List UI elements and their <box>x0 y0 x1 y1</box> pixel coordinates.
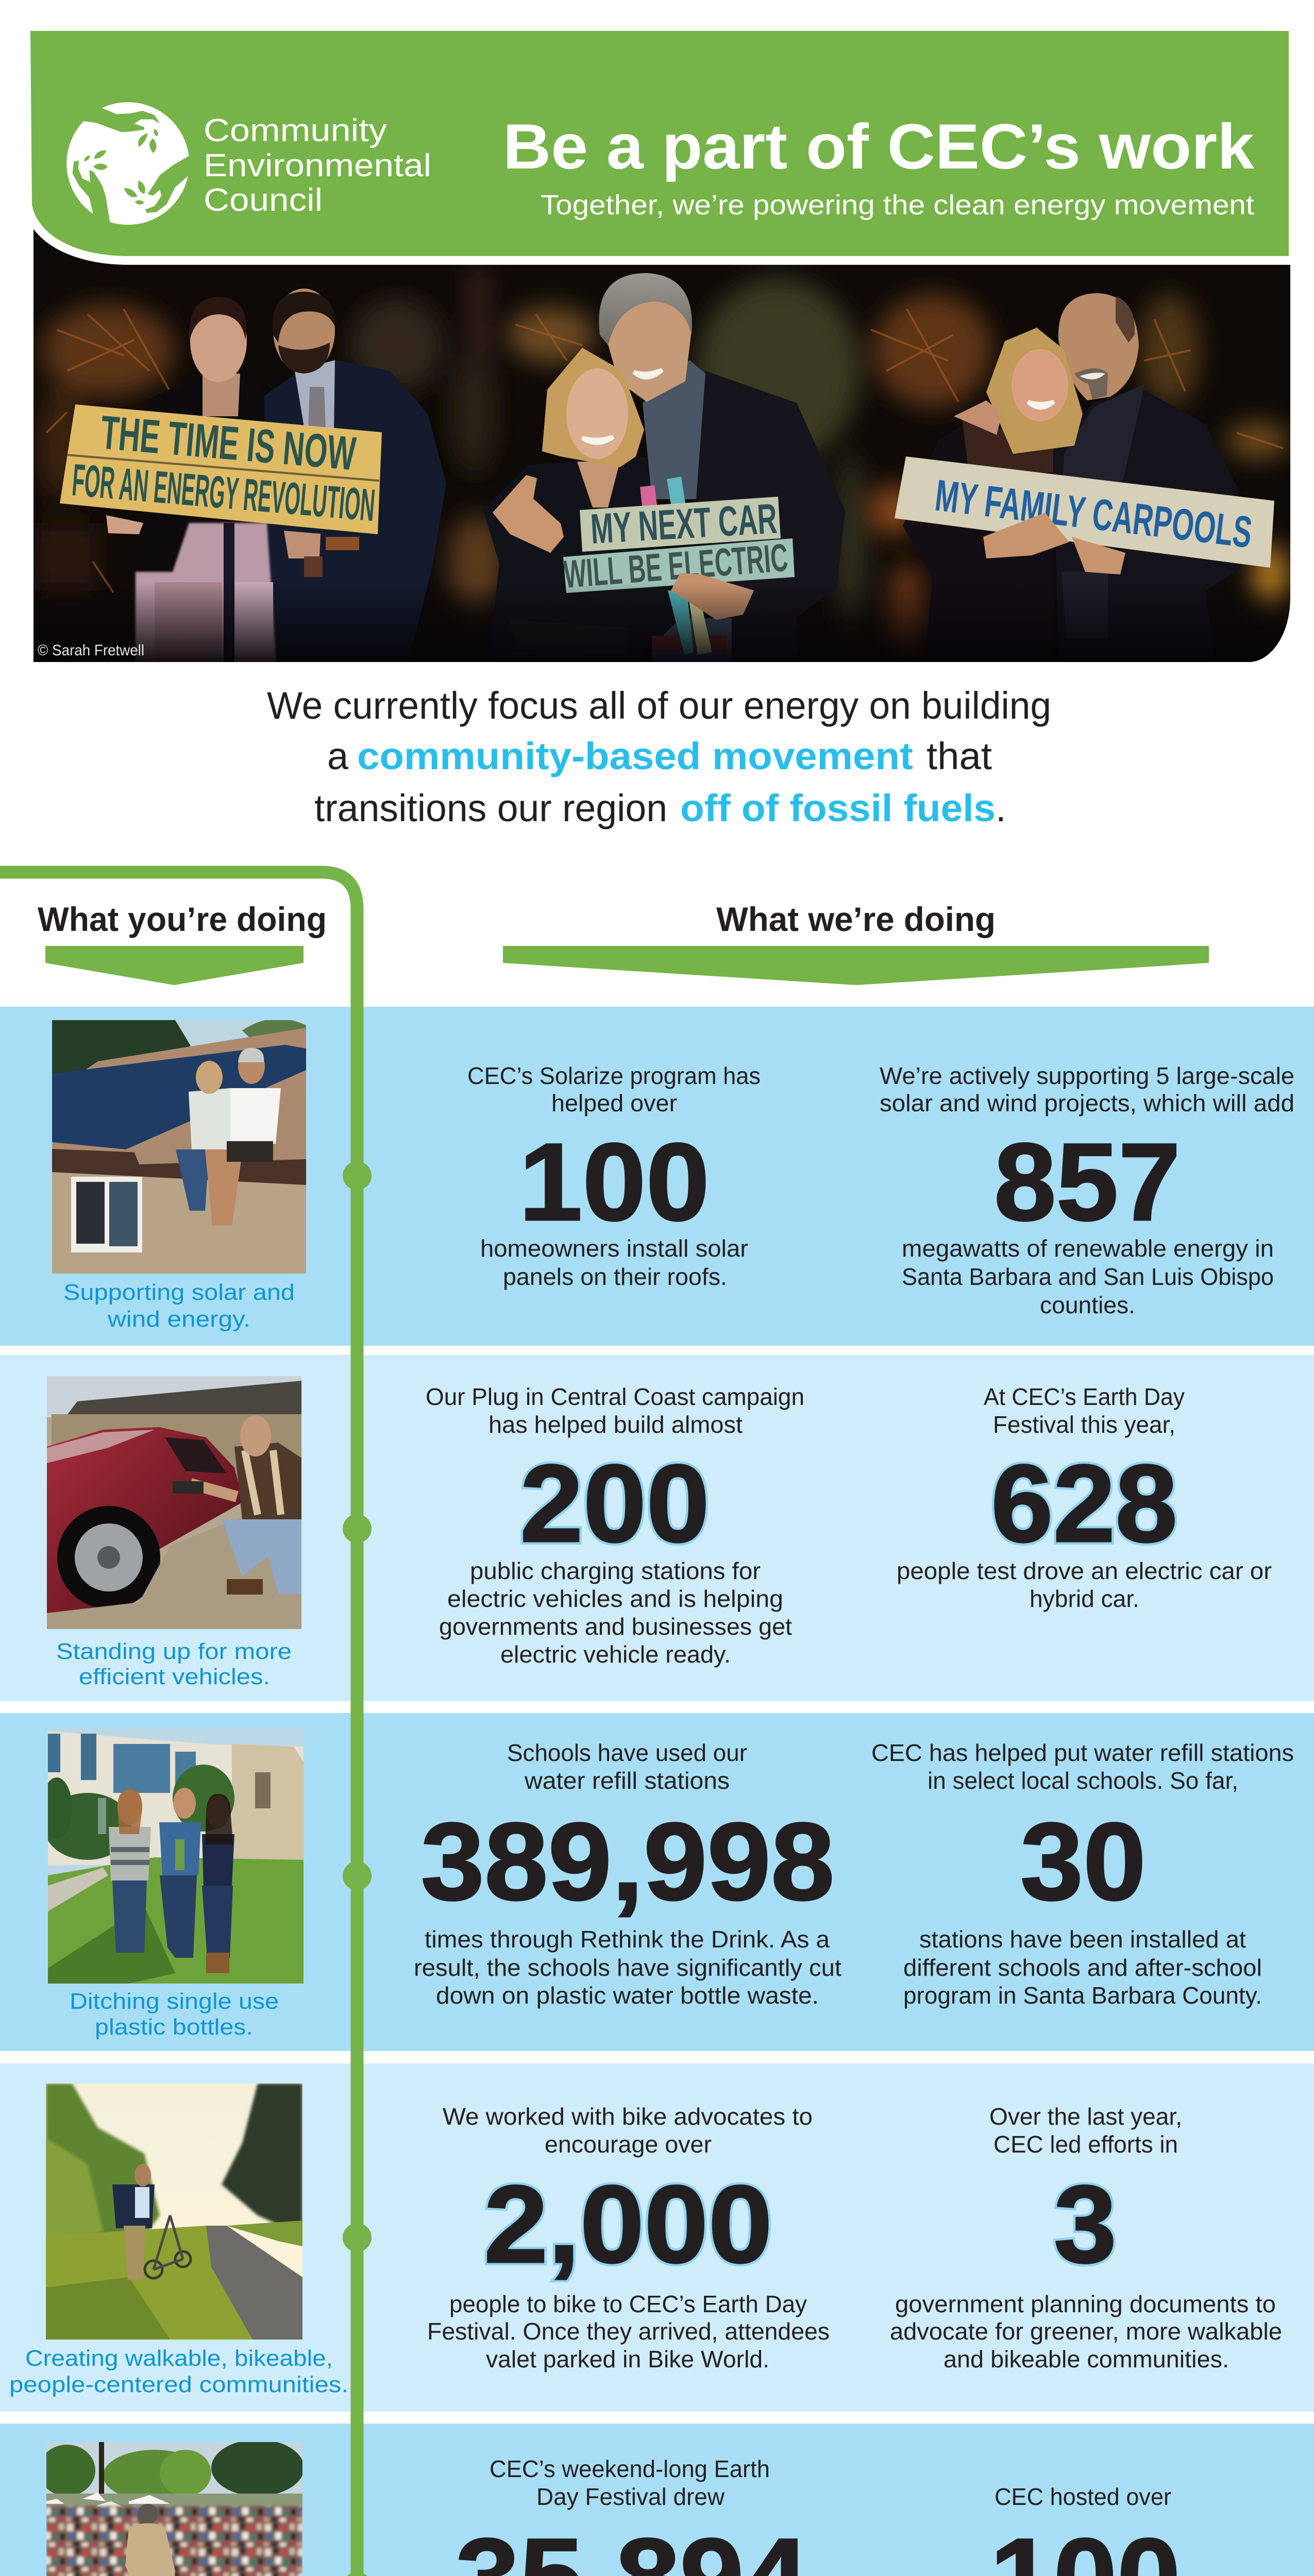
stat: charging stations: 200 <box>520 1442 710 1565</box>
intro statement: . <box>996 787 1006 829</box>
caption <box>9 2346 348 2397</box>
photo: speaker facing festival crowd <box>39 2439 341 2576</box>
intro statement: We currently focus all of our energy on building <box>267 684 1051 727</box>
logo wordmark: Environmental <box>204 148 431 183</box>
sign: my family carpools <box>895 456 1274 568</box>
logo: globe and hands <box>66 98 196 230</box>
stat: solarize homeowners <box>467 1062 761 1290</box>
stat: planning documents: Over the last year, <box>989 2103 1182 2130</box>
stat: renewable megawatts: counties. <box>1040 1292 1135 1318</box>
woman: body <box>483 456 676 634</box>
photo: man charging electric car <box>47 1376 301 1629</box>
photo: man with bike on sunny road <box>46 2083 302 2340</box>
stat: test drives: At CEC’s Earth Day <box>984 1383 1185 1410</box>
intro statement: that <box>926 735 992 777</box>
logo wordmark: Community <box>204 113 387 148</box>
man: head <box>1058 293 1139 400</box>
stat: charging stations <box>426 1383 804 1668</box>
stat: planning documents: advocate for greener, more walkable <box>890 2318 1282 2345</box>
stat: refill stations <box>871 1739 1294 2009</box>
stat: refill uses: 389,998 <box>420 1800 835 1923</box>
stat: refill stations: CEC has helped put water refill stations <box>871 1739 1294 1766</box>
column heading: what we're doing <box>503 900 1209 985</box>
photo: foliage background <box>33 269 1288 654</box>
photo 1: couple with "the time is now" sign: FOR AN ENERGY REVOLUTION <box>70 454 377 531</box>
panel: walkable communities <box>9 2083 1282 2397</box>
photo credit: © Sarah Fretwell <box>38 642 144 659</box>
stat: refill uses: water refill stations <box>524 1767 730 1794</box>
stat: solarize homeowners: homeowners install solar <box>480 1235 748 1262</box>
sign: my next car will be electric: MY NEXT CAR <box>589 495 778 553</box>
stat: charging stations: electric vehicles and is helping <box>447 1585 783 1612</box>
intro statement: transitions our region <box>314 787 667 829</box>
stat: solarize homeowners: 100 <box>519 1121 710 1244</box>
woman: head <box>566 368 628 459</box>
man: suit <box>1053 387 1241 662</box>
stakes <box>640 485 657 506</box>
caption: wind energy. <box>107 1307 250 1332</box>
stat: charging stations: electric vehicle ready. <box>500 1641 731 1668</box>
sign: the time is now: THE TIME IS NOW <box>98 406 358 480</box>
stat: test drives: 628 <box>991 1442 1177 1565</box>
stat: test drives <box>897 1383 1272 1612</box>
panel: efficient vehicles <box>47 1376 1272 1689</box>
stat: test drives: 628 <box>991 1442 1177 1565</box>
caption: Ditching single use <box>70 1989 279 2014</box>
logo wordmark: Council <box>204 182 323 218</box>
subtitle: Together, we’re powering the clean energy movement <box>541 190 1254 221</box>
stat: charging stations: has helped build almost <box>488 1411 743 1438</box>
woman: patterned dress <box>136 523 276 662</box>
woman: body <box>903 419 1056 662</box>
stat: charging stations: public charging stations for <box>470 1557 761 1584</box>
stat: bike riders <box>427 2103 830 2372</box>
column heading: what we're doing: What we’re doing <box>716 900 996 938</box>
stat: refill stations: program in Santa Barbara County. <box>903 1982 1262 2009</box>
woman: hair <box>986 328 1083 454</box>
sign: the time is now <box>60 404 382 534</box>
photo: students with bottles <box>41 1728 304 1984</box>
stat: planning documents: and bikeable communities. <box>944 2346 1229 2372</box>
caption: Standing up for more <box>56 1639 292 1664</box>
panel: single use plastic <box>41 1728 1294 2040</box>
stat: refill uses: times through Rethink the Drink. As a <box>425 1926 830 1953</box>
stat: solarize homeowners: helped over <box>551 1090 677 1116</box>
man: hand on shoulder <box>954 400 1002 435</box>
stat: renewable megawatts: Santa Barbara and San Luis Obispo <box>902 1263 1274 1290</box>
stat: refill uses <box>414 1739 841 2009</box>
title: Be a part of CEC’s work <box>503 111 1255 182</box>
stat: renewable megawatts <box>880 1062 1294 1318</box>
stat: planning documents: CEC led efforts in <box>993 2131 1178 2158</box>
sign: my next car will be electric <box>562 495 795 597</box>
row background bands <box>0 1007 1314 2576</box>
stat: solarize homeowners: CEC’s Solarize program has <box>467 1062 761 1089</box>
man: suit <box>696 371 845 662</box>
stat: solarize homeowners: panels on their roofs. <box>503 1263 727 1290</box>
column heading: what you're doing <box>38 900 327 985</box>
stat: festival attendance: Day Festival drew <box>536 2483 725 2510</box>
stat: test drives: hybrid car. <box>1030 1585 1139 1612</box>
stat: renewable megawatts: megawatts of renewable energy in <box>902 1235 1274 1262</box>
stat: festival attendance: CEC’s weekend-long Earth <box>490 2455 770 2482</box>
stat: planning documents: government planning documents to <box>895 2291 1276 2317</box>
stat: bike riders: 2,000 <box>484 2163 772 2286</box>
woman: head <box>190 314 247 382</box>
woman: hair <box>542 348 644 467</box>
stat: refill stations: stations have been installed at <box>919 1926 1246 1953</box>
woman: jacket and neckline <box>146 388 265 421</box>
green timeline with nodes <box>0 872 372 2576</box>
stat: refill uses: result, the schools have significantly cut <box>414 1954 841 1981</box>
panel: showing up <box>39 2439 1249 2576</box>
stat: renewable megawatts: We’re actively supporting 5 large-scale <box>880 1062 1294 1089</box>
stat: test drives: people test drove an electric car or <box>897 1557 1272 1584</box>
stat: bike riders: encourage over <box>545 2131 712 2158</box>
photo: dark fade at base <box>33 582 1290 662</box>
caption <box>63 1280 295 1332</box>
header banner <box>30 31 1289 256</box>
stat: bike riders: We worked with bike advocates to <box>443 2103 813 2130</box>
caption: efficient vehicles. <box>79 1664 270 1689</box>
stat: planning documents: 3 <box>1054 2163 1117 2286</box>
photo strip: event guests holding signs <box>33 206 1290 662</box>
stat: renewable megawatts: solar and wind projects, which will add <box>880 1090 1294 1116</box>
stat: refill stations: different schools and after-school <box>903 1954 1262 1981</box>
intro statement: a <box>327 735 349 777</box>
caption: people-centered communities. <box>9 2372 348 2397</box>
stat: planning documents <box>890 2103 1282 2372</box>
intro statement <box>267 684 1051 829</box>
photo 3: couple with family carpools sign <box>895 293 1274 662</box>
intro statement: off of fossil fuels <box>680 787 996 829</box>
woman: head <box>1012 349 1068 421</box>
stat: charging stations: Our Plug in Central Coast campaign <box>426 1383 804 1410</box>
stat: bike riders: people to bike to CEC’s Earth Day <box>449 2291 807 2317</box>
stat: symposium attendees: CEC hosted over <box>995 2483 1171 2510</box>
photo: couple on solar roof <box>52 1019 306 1274</box>
sign: my next car will be electric: WILL BE ELECTRIC <box>562 536 789 597</box>
caption: plastic bottles. <box>95 2014 253 2040</box>
stat: renewable megawatts: 857 <box>994 1121 1181 1244</box>
logo wordmark <box>204 113 431 218</box>
stat: festival attendance <box>446 2455 814 2576</box>
caption <box>56 1639 292 1689</box>
stat: charging stations: 200 <box>520 1442 710 1565</box>
man: head <box>608 301 692 402</box>
stat: refill stations: in select local schools. So far, <box>928 1767 1238 1794</box>
stat: test drives: Festival this year, <box>993 1411 1175 1438</box>
man: head <box>273 289 335 363</box>
stat: bike riders: valet parked in Bike World. <box>486 2346 769 2372</box>
photo: foliage streaks <box>46 309 1283 592</box>
stat: bike riders: 2,000 <box>484 2163 772 2286</box>
man: suit <box>264 360 446 650</box>
caption <box>70 1989 279 2040</box>
stat: refill stations: 30 <box>1020 1800 1146 1923</box>
coin belt <box>510 620 631 655</box>
stat: charging stations: governments and businesses get <box>439 1613 792 1640</box>
column heading: what you're doing: What you’re doing <box>38 900 327 938</box>
stat: refill uses: Schools have used our <box>507 1739 747 1766</box>
panel: solar and wind <box>52 1019 1294 1332</box>
stat: refill uses: down on plastic water bottle waste. <box>436 1982 819 2009</box>
stat: symposium attendees <box>918 2483 1249 2576</box>
intro statement: community-based movement <box>357 735 913 777</box>
man: arm and hand on shoulder <box>493 475 564 553</box>
stat: bike riders: Festival. Once they arrived, attendees <box>427 2318 830 2345</box>
photo 2: couple with electric car signs <box>483 273 845 662</box>
stat: planning documents: 3 <box>1054 2163 1117 2286</box>
caption: Creating walkable, bikeable, <box>25 2346 333 2371</box>
photo 1: couple with "the time is now" sign <box>60 289 446 662</box>
caption: Supporting solar and <box>63 1280 295 1305</box>
